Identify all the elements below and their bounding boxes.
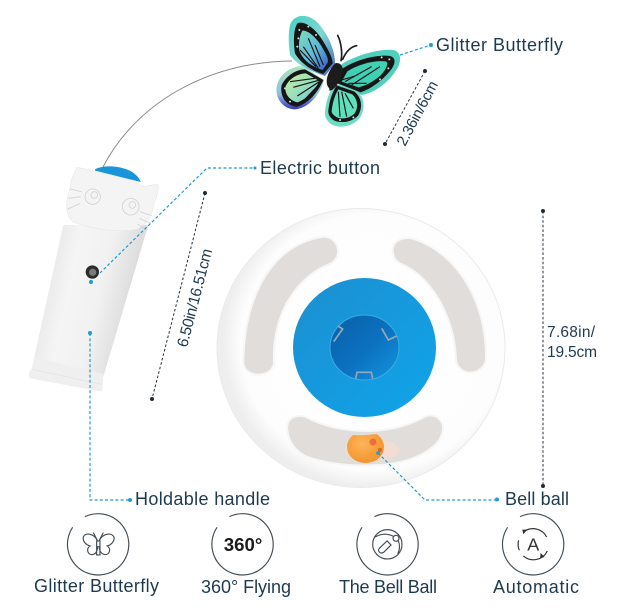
hole clips bbox=[334, 326, 397, 379]
icon: butterfly badge bbox=[67, 514, 129, 575]
dimension: 6.50in/16.51cm: 6.50in/16.51cm bbox=[174, 247, 216, 349]
handle base ring bbox=[29, 357, 103, 392]
dimension: 7.68in/19.5cm bbox=[547, 324, 597, 361]
icon: 360 badge bbox=[212, 514, 273, 575]
ball reflection bbox=[345, 439, 399, 461]
icon: bell ball badge bbox=[357, 514, 418, 575]
callout line: butterfly bbox=[400, 43, 433, 55]
blue button on top bbox=[95, 166, 141, 182]
dimension: 7.68in/19.5cm: 7.68in/ bbox=[547, 324, 596, 341]
track slots bbox=[243, 237, 486, 465]
dimension line: butterfly width bbox=[383, 69, 427, 146]
label: Bell ball: Bell ball bbox=[505, 489, 569, 509]
icon: glitter butterfly bbox=[276, 16, 400, 127]
wire bbox=[103, 61, 292, 167]
dimension line: disc diameter bbox=[541, 209, 545, 488]
dimension line: handle length bbox=[150, 191, 207, 401]
dimension: 7.68in/19.5cm: 19.5cm bbox=[547, 344, 597, 361]
label: Glitter Butterfly: Glitter Butterfly bbox=[34, 576, 159, 596]
icon: automatic badge: A bbox=[527, 535, 539, 555]
label: The Bell Ball: The Bell Ball bbox=[339, 577, 437, 597]
cat head bbox=[67, 167, 158, 231]
centre hole bbox=[330, 315, 399, 380]
toy track disc bbox=[217, 208, 505, 488]
handle with cat head bbox=[29, 166, 158, 392]
label: Glitter Butterfly: Glitter Butterfly bbox=[436, 35, 563, 55]
icon: 360 badge: 360° bbox=[224, 534, 262, 555]
callout line: holdable handle bbox=[88, 331, 132, 502]
label: 360° Flying: 360° Flying bbox=[201, 577, 291, 597]
callout line: bell ball bbox=[376, 451, 499, 502]
label: Automatic: Automatic bbox=[493, 577, 579, 597]
callout line: electric button bbox=[89, 166, 256, 284]
label: Electric button: Electric button bbox=[260, 158, 380, 178]
label: Holdable handle: Holdable handle bbox=[135, 489, 270, 509]
handle body bbox=[34, 225, 148, 377]
dimension: 2.36in/6cm: 2.36in/6cm bbox=[394, 78, 442, 149]
cat face bbox=[67, 189, 152, 230]
icon: automatic badge bbox=[502, 514, 564, 575]
power button bbox=[86, 265, 99, 279]
blue centre ring bbox=[293, 278, 436, 417]
bell ball bbox=[347, 431, 384, 463]
